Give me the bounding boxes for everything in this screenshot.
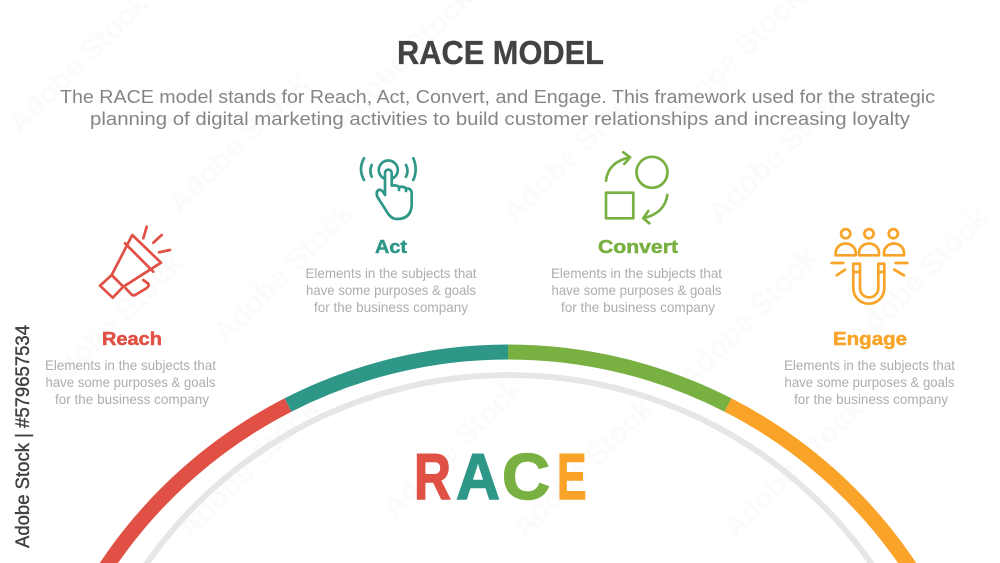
text: Adobe Stock <box>672 242 825 395</box>
text: reach description: have some purposes & goals <box>46 374 216 390</box>
text: reach description: for the business company <box>55 391 209 407</box>
text: act description: have some purposes & goals <box>306 282 476 298</box>
text: act description <box>306 265 477 315</box>
segmented arc <box>100 344 916 563</box>
column: act <box>306 158 477 315</box>
RACE wordmark: E <box>557 440 586 513</box>
text: convert description: Elements in the subjects that <box>551 265 722 281</box>
icon: megaphone <box>100 227 170 298</box>
icon: touch hand <box>361 158 416 219</box>
text: convert description: for the business company <box>561 299 715 315</box>
text: Adobe Stock <box>702 77 855 230</box>
text: act description: Elements in the subjects that <box>306 265 477 281</box>
text: engage description: Elements in the subjects that <box>784 357 955 373</box>
text: Adobe Stock <box>37 247 190 400</box>
text: reach description: Elements in the subjects that <box>45 357 216 373</box>
title: RACE MODEL <box>397 34 604 71</box>
description text: The RACE model stands for Reach, Act, Convert, and Engage. This framework used for the strategic <box>60 86 935 107</box>
description text: planning of digital marketing activities to build customer relationships and increasing loyalty <box>90 108 911 129</box>
heading: engage: Engage <box>833 328 907 349</box>
text: engage description <box>784 357 955 407</box>
text: convert description: have some purposes & goals <box>552 282 722 298</box>
RACE wordmark <box>414 440 586 513</box>
icon: magnet with people <box>832 229 907 304</box>
heading: reach: Reach <box>102 328 162 349</box>
RACE wordmark: C <box>502 440 550 513</box>
arc segment: act <box>285 344 508 412</box>
column: reach <box>45 227 216 407</box>
text: act description: for the business company <box>314 299 468 315</box>
text: Adobe Stock <box>842 202 995 355</box>
column: convert <box>551 152 722 315</box>
column: engage <box>784 229 955 407</box>
arc segment: engage <box>725 398 916 563</box>
text: reach description <box>45 357 216 407</box>
RACE wordmark: A <box>456 440 500 513</box>
inner grey arc <box>143 372 875 563</box>
heading: act: Act <box>375 236 407 257</box>
RACE wordmark: R <box>414 440 451 513</box>
text: Adobe Stock <box>507 392 660 545</box>
description text <box>60 86 935 129</box>
text: Adobe Stock <box>162 67 315 220</box>
text: Adobe Stock <box>172 392 325 545</box>
text: engage description: have some purposes & goals <box>784 374 954 390</box>
heading: convert: Convert <box>598 236 678 257</box>
arc segment: convert <box>508 344 731 412</box>
text: engage description: for the business company <box>794 391 948 407</box>
stock side label: Adobe Stock | #579657534 <box>13 325 34 548</box>
text: convert description <box>551 265 722 315</box>
text: Adobe Stock <box>717 392 870 545</box>
arc segment: reach <box>100 398 291 563</box>
icon: cycle shapes <box>606 152 668 223</box>
text: Adobe Stock <box>497 77 650 230</box>
text: Adobe Stock <box>207 197 360 350</box>
text: Adobe Stock <box>377 372 530 525</box>
